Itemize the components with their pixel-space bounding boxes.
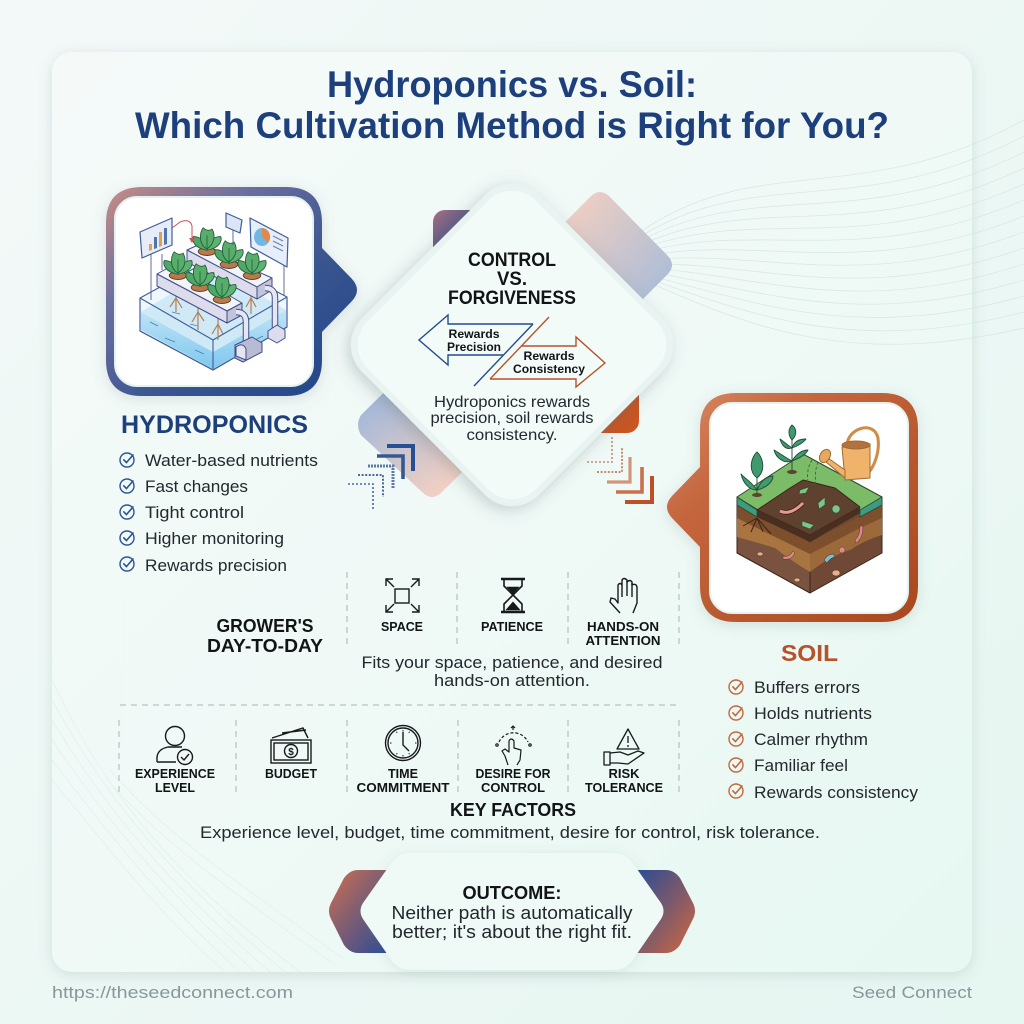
heading: control vs forgiveness: VS. (497, 269, 527, 290)
label: time commitment: TIME (388, 766, 418, 781)
heading: key factors: KEY FACTORS (450, 800, 576, 820)
pump (235, 337, 262, 362)
icon: hand (610, 578, 637, 613)
icon: budget (271, 728, 311, 763)
icon: desire for control (496, 726, 531, 765)
watering can (847, 428, 878, 474)
arrow: rewards precision: Rewards (448, 329, 500, 341)
panel: grower's day-to-day (207, 572, 679, 690)
icon: risk tolerance (604, 729, 644, 765)
seedlings (741, 425, 808, 496)
list: hydroponics traits: Fast changes (145, 477, 248, 496)
arrow: rewards consistency (490, 317, 605, 387)
heading: hydroponics: HYDROPONICS (121, 411, 308, 439)
background shapes (358, 192, 672, 497)
list: soil traits: Calmer rhythm (754, 730, 868, 749)
list: hydroponics traits: Water-based nutrients (145, 451, 318, 470)
label: desire for control (476, 766, 551, 795)
label: risk tolerance (585, 766, 663, 795)
label: experience level: EXPERIENCE (135, 766, 215, 781)
arrow: rewards consistency: Consistency (513, 364, 586, 376)
footer url: https://theseedconnect.com (52, 983, 293, 1002)
label: patience: PATIENCE (481, 619, 543, 634)
right chevron (629, 870, 695, 953)
arrow: rewards precision: Precision (447, 342, 501, 354)
outcome hexagon (360, 853, 664, 970)
soil illustration frame (667, 393, 918, 622)
text: control vs forgiveness summary (430, 394, 594, 444)
panel: outcome (329, 853, 695, 970)
icon: clock (386, 726, 420, 760)
arrow: rewards consistency: Rewards (524, 351, 574, 363)
label: desire for control: DESIRE FOR (476, 766, 551, 781)
label: experience level (135, 766, 215, 795)
title (135, 64, 889, 146)
left chevron (329, 870, 395, 953)
label: hands-on attention: HANDS-ON (587, 619, 659, 634)
heading: control vs forgiveness: FORGIVENESS (448, 288, 576, 309)
icon: budget: $ (288, 747, 294, 758)
panel: soil (667, 393, 919, 802)
label: risk tolerance: TOLERANCE (585, 780, 663, 795)
list: soil traits (729, 678, 919, 802)
label: time commitment: COMMITMENT (356, 780, 450, 795)
text: control vs forgiveness summary: precision, soil rewards (430, 410, 594, 427)
text: day-to-day description: Fits your space, patience, and desired (362, 653, 662, 672)
text: outcome: OUTCOME: (462, 883, 562, 903)
label: space: SPACE (381, 619, 423, 634)
text: control vs forgiveness summary: Hydroponics rewards (434, 394, 590, 411)
text: outcome: Neither path is automatically (392, 903, 632, 923)
arrow: chevrons toward center from hydroponics (348, 446, 413, 510)
label: experience level: LEVEL (155, 780, 195, 795)
icon: hydroponic system (140, 213, 288, 370)
text: day-to-day description: hands-on attention. (434, 671, 590, 690)
decorative wave lines right (640, 120, 1024, 344)
title: Which Cultivation Method is Right for You? (135, 105, 889, 146)
pipes (236, 312, 246, 345)
hydroponics illustration frame (106, 187, 357, 396)
center diamond (335, 168, 689, 522)
title: Hydroponics vs. Soil: (327, 64, 697, 105)
label: hands-on attention: ATTENTION (586, 633, 660, 648)
label: risk tolerance: RISK (608, 766, 640, 781)
heading: grower's day-to-day (207, 616, 323, 656)
list: soil traits: Familiar feel (754, 756, 848, 775)
list: hydroponics traits: Higher monitoring (145, 529, 284, 548)
arrow: chevrons toward soil (587, 437, 652, 502)
heading: grower's day-to-day: GROWER'S (216, 616, 314, 636)
heading: grower's day-to-day: DAY-TO-DAY (207, 636, 323, 656)
label: budget: BUDGET (265, 766, 317, 781)
back tray (187, 245, 272, 287)
heading: control vs forgiveness (448, 250, 576, 309)
text: key factors description: Experience level, budget, time commitment, desire for control, risk tolerance. (200, 823, 820, 842)
decorative wave lines bottom left (52, 680, 345, 972)
icon: space (386, 579, 419, 612)
icon: patience hourglass (501, 579, 525, 612)
list: soil traits: Buffers errors (754, 678, 860, 697)
heading: soil: SOIL (781, 640, 838, 666)
arrow: rewards precision (419, 315, 533, 386)
label: hands-on attention (586, 619, 660, 648)
list: soil traits: Rewards consistency (754, 783, 919, 802)
plants (193, 228, 221, 256)
text: control vs forgiveness summary: consistency. (466, 427, 558, 444)
icon: soil block with watering can (737, 425, 882, 593)
panel: control vs forgiveness (335, 168, 689, 522)
list: hydroponics traits: Tight control (145, 503, 244, 522)
roots (170, 290, 256, 340)
heading: control vs forgiveness: CONTROL (468, 250, 556, 271)
list: soil traits: Holds nutrients (754, 704, 872, 723)
text: outcome: better; it's about the right fit. (392, 922, 632, 942)
label: desire for control: CONTROL (481, 780, 545, 795)
icon: experience level (157, 726, 192, 764)
list: hydroponics traits (120, 451, 318, 575)
footer brand: Seed Connect (852, 983, 972, 1002)
text: day-to-day description (362, 653, 662, 690)
list: hydroponics traits: Rewards precision (145, 556, 287, 575)
text: outcome (392, 883, 632, 942)
monitor panels (151, 230, 284, 300)
label: time commitment (356, 766, 450, 795)
panel: key factors (119, 705, 820, 842)
front tray (157, 264, 242, 311)
panel: hydroponics (106, 187, 357, 575)
